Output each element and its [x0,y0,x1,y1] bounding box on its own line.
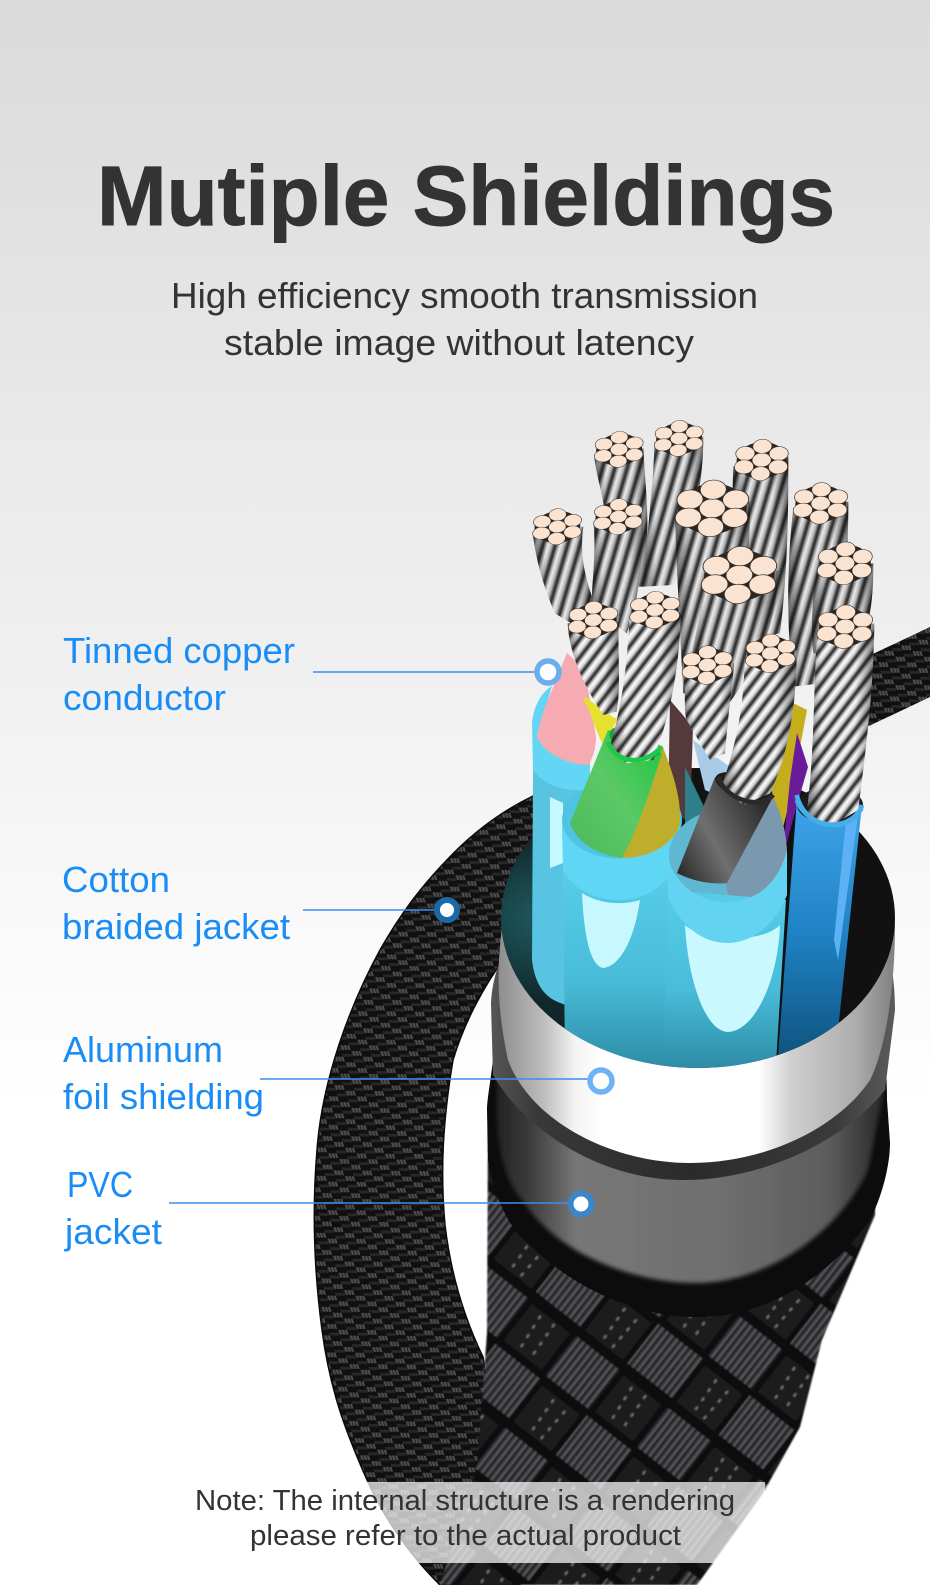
front left tube body [562,825,680,1072]
label: cotton braided jacket: braided jacket [62,906,290,947]
label: aluminum foil shielding: foil shielding [63,1076,264,1117]
label: cotton braided jacket [62,859,457,947]
inner tubes and coloured cables [532,653,863,1072]
cable rims over strands [585,698,862,825]
subtitle: High efficiency smooth transmission [171,275,758,316]
back left tube [532,686,590,1005]
tinned copper strands [530,418,874,827]
strand yellow cable [568,617,619,715]
purple cable [784,733,808,844]
title: Mutiple Shieldings [97,149,835,243]
strand light blue cable [682,663,734,760]
dark band above PVC [491,950,895,1180]
label: PVC jacket [64,1164,591,1252]
braided cable loop, left section [314,796,540,1585]
cable illustration [314,418,930,1585]
yellow cable rear [771,703,807,826]
strand right middle [812,563,873,653]
note text: please refer to the actual product [250,1520,681,1552]
subtitle: stable image without latency [224,322,694,363]
front left tube back wall [562,790,682,858]
strand blue cable [807,623,874,827]
label: aluminum foil shielding [63,1029,612,1117]
label: tinned copper conductor [63,630,559,718]
braided cable loop, back section [850,627,930,735]
strand back right [733,457,788,640]
green cable [570,720,665,858]
label: PVC jacket: PVC [67,1164,133,1205]
black cable [677,766,776,883]
olive yellow cable [623,745,680,860]
blue tube [777,787,863,1070]
front centre tube back wall [669,814,787,896]
front centre tube body [663,850,787,1072]
strand far right [788,502,848,687]
strand back left [594,448,647,587]
PVC jacket grey body [497,1000,883,1283]
strand black cable [722,650,797,805]
inner cavity [501,768,895,1068]
braided cable lower section [440,1130,875,1585]
label: tinned copper conductor: Tinned copper [63,630,295,671]
PVC outer black ring [487,1060,890,1317]
note band [180,1482,765,1563]
aluminum foil band [499,925,895,1163]
grey blue cable [726,798,787,897]
strand centre large front [685,570,778,707]
label: cotton braided jacket: Cotton [62,859,170,900]
light blue cable [693,740,728,792]
subtitle [171,275,758,363]
label: PVC jacket: jacket [64,1211,162,1252]
strand left outer [533,527,593,627]
label: tinned copper conductor: conductor [63,677,226,718]
strand centre large [675,502,750,693]
strand back centre [643,437,703,587]
note text [195,1485,735,1552]
pink cable [537,653,596,765]
label: aluminum foil shielding: Aluminum [63,1029,223,1070]
note text: Note: The internal structure is a rendering [195,1485,735,1517]
maroon cable [668,700,693,820]
strand left inner [592,515,643,633]
copper conductor ends [530,418,874,687]
bright yellow cable [585,697,617,745]
strand green cable [610,608,681,763]
teal cable [685,767,704,824]
